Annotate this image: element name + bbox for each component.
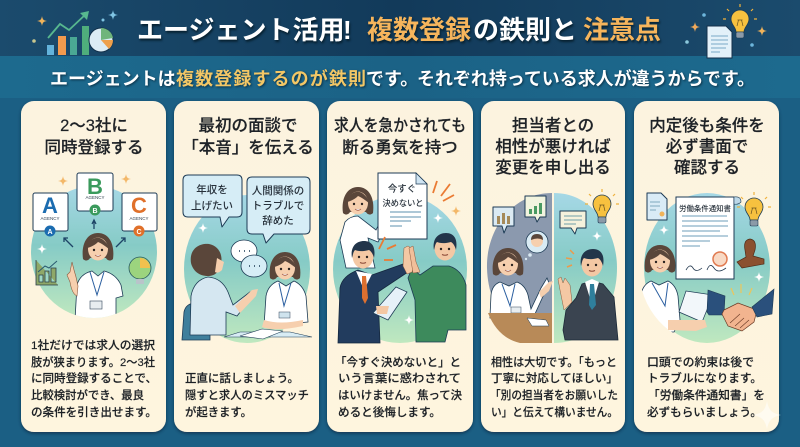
illustration: three agencies and nurse: A <box>42 193 58 218</box>
illustration: three agencies and nurse: B <box>92 208 98 215</box>
illustration: honest interview <box>182 175 312 343</box>
illustration: refusing pressure: 決めないと <box>382 197 424 208</box>
heading: card 3 <box>334 116 466 157</box>
heading: card 3: 求人を急かされても <box>334 116 466 135</box>
body text: card 4: 相性は大切です。「もっと <box>491 355 617 369</box>
body text: card 3: めると後悔します。 <box>338 405 441 419</box>
illustration: honest interview: トラブルで <box>252 199 304 212</box>
title: ! <box>343 15 352 45</box>
body text: card 4 <box>490 355 618 419</box>
body text: card 3: はいけません。焦って決 <box>338 388 463 402</box>
body text: card 1: 肢が狭まります。2〜3社 <box>31 355 156 369</box>
body text: card 5: 「労働条件通知書」を <box>648 388 765 402</box>
subtitle: それぞれ持っている求人が違うからです。 <box>417 68 755 89</box>
illustration: three agencies and nurse: AGENCY <box>129 216 149 221</box>
illustration: three agencies and nurse: B <box>87 174 103 199</box>
body text: card 4: 「別の担当者をお願いした <box>490 388 618 402</box>
illustration: three agencies and nurse: AGENCY <box>40 216 60 221</box>
body text: card 3: いう言葉に惑わされて <box>338 371 461 385</box>
heading: card 1 <box>44 116 144 157</box>
illustration: honest interview: 辞めた <box>262 214 294 227</box>
heading: card 2: 「本音」を伝える <box>182 138 314 157</box>
body text: card 3: 「今すぐ決めないと」と <box>335 355 461 369</box>
body text: card 1: 比較検討ができ、最良 <box>31 388 144 402</box>
icon: faint sparkle <box>753 401 781 429</box>
body text: card 4: い」と伝えて構いません。 <box>491 405 618 419</box>
body text: card 2: が起きます。 <box>185 405 252 419</box>
icon: growth chart with pie <box>32 10 118 55</box>
illustration: three agencies and nurse: C <box>131 193 147 218</box>
heading: card 5: 内定後も条件を <box>649 116 765 135</box>
heading: card 1: 同時登録する <box>44 138 144 157</box>
body text: card 1 <box>31 338 157 419</box>
subtitle: です。 <box>366 69 418 89</box>
title: の鉄則と <box>473 15 577 45</box>
illustration: written contract: 労働条件通知書 <box>679 204 731 213</box>
heading: card 2 <box>182 116 314 157</box>
heading: card 1: 2〜3社に <box>60 116 128 135</box>
heading: card 3: 断る勇気を持つ <box>342 138 458 157</box>
body text: card 1: 1社だけでは求人の選択 <box>31 338 156 352</box>
heading: card 4 <box>495 116 611 177</box>
body text: card 5: トラブルになります。 <box>647 371 762 385</box>
panel: card 2 <box>174 101 319 432</box>
illustration: honest interview: 上げたい <box>191 200 233 212</box>
body text: card 2: 正直に話しましょう。 <box>185 371 299 385</box>
illustration: three agencies and nurse: C <box>136 229 142 236</box>
title: エージェント活用 <box>137 15 344 45</box>
panel: card 3 <box>327 101 473 432</box>
panel: card 5 <box>634 101 781 432</box>
body text: card 5: 口頭での約束は後で <box>647 355 754 369</box>
title: 複数登録 <box>367 15 471 45</box>
heading: card 4: 担当者との <box>512 116 594 135</box>
body text: card 1: に同時登録することで、 <box>31 371 157 385</box>
illustration: refusing pressure <box>333 173 467 343</box>
body text: card 2: 隠すと求人のミスマッチ <box>185 388 309 402</box>
header band <box>0 0 800 56</box>
icon: document and lightbulb <box>685 4 767 58</box>
body text: card 4: 丁寧に対応してほしい」 <box>491 371 618 385</box>
heading: card 5: 必ず書面で <box>666 137 748 156</box>
body text: card 5 <box>647 355 765 419</box>
heading: card 5 <box>649 116 765 177</box>
body text: card 1: の条件を引き出せます。 <box>31 405 157 419</box>
heading: card 2: 最初の面談で <box>198 116 298 135</box>
illustration: honest interview: 人間関係の <box>252 184 304 197</box>
panel: card 1 <box>21 101 166 432</box>
illustration: refusing pressure: 今すぐ <box>388 183 416 194</box>
title: 注意点 <box>583 15 661 45</box>
illustration: three agencies and nurse <box>31 173 157 320</box>
body text: card 2 <box>185 371 309 419</box>
illustration: three agencies and nurse: AGENCY <box>85 195 105 200</box>
body text: card 5: 必ずもらいましょう。 <box>647 405 762 419</box>
subtitle: 複数登録するのが鉄則 <box>176 68 366 89</box>
illustration: written contract <box>640 192 774 343</box>
panel: card 4 <box>481 101 625 432</box>
body text: card 3 <box>335 355 463 419</box>
subtitle <box>50 68 755 89</box>
illustration: change of agent <box>487 189 619 343</box>
illustration: three agencies and nurse: A <box>47 229 53 236</box>
subtitle band <box>0 56 800 98</box>
subtitle: エージェントは <box>50 69 176 89</box>
heading: card 4: 変更を申し出る <box>495 158 611 177</box>
heading: card 5: 確認する <box>674 158 740 177</box>
illustration: honest interview: 年収を <box>196 183 228 196</box>
heading: card 4: 相性が悪ければ <box>495 136 611 156</box>
